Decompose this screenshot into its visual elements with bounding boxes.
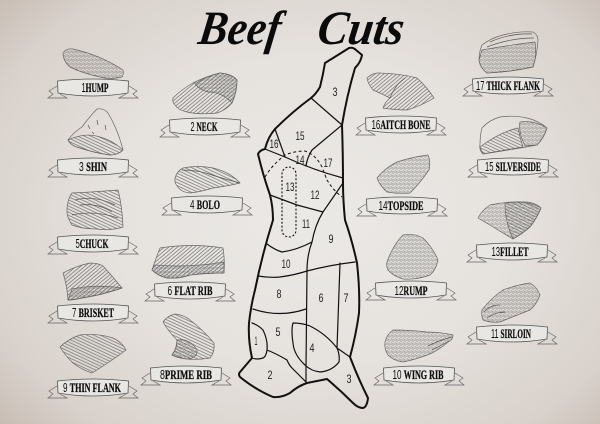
icon: wing rib cut bbox=[385, 330, 453, 362]
panel: 16 aitch bone bbox=[356, 73, 446, 135]
panel: 6 flat rib bbox=[145, 246, 235, 301]
icon: shin cut bbox=[68, 109, 123, 155]
icon: rump cut bbox=[387, 234, 438, 279]
ribbon: 8 prime rib: 8PRIME RIB bbox=[160, 367, 212, 382]
panel: 5 chuck bbox=[48, 190, 138, 254]
icon: fillet cut bbox=[478, 202, 541, 239]
diagram: beef carcass bbox=[239, 48, 368, 408]
ribbon: 10 wing rib: 10 WING RIB bbox=[392, 367, 444, 382]
panel: 12 rump bbox=[366, 234, 456, 300]
icon: thick flank cut bbox=[479, 32, 538, 73]
panel: 17 thick flank bbox=[463, 32, 553, 96]
cut boundary lines bbox=[252, 98, 355, 383]
panel: 2 neck bbox=[160, 73, 250, 137]
ribbon: 4 bolo: 4 BOLO bbox=[190, 197, 220, 212]
panel: 11 sirloin bbox=[467, 283, 557, 344]
icon: bolo cut bbox=[175, 166, 240, 193]
cut numbers: 3 bbox=[332, 87, 338, 99]
cut numbers: 17 bbox=[324, 158, 332, 170]
title: Beef bbox=[195, 2, 289, 55]
cut numbers: 14 bbox=[296, 155, 305, 167]
panel: 3 shin bbox=[48, 109, 138, 177]
cut numbers: 10 bbox=[282, 259, 290, 271]
ribbon: 13 fillet: 13FILLET bbox=[492, 244, 529, 259]
panel: 9 thin flank bbox=[48, 334, 138, 398]
icon: hump cut bbox=[63, 49, 123, 78]
title bbox=[195, 2, 408, 55]
ribbon: 3 shin: 3 SHIN bbox=[79, 159, 107, 174]
icon: thin flank cut bbox=[60, 334, 126, 373]
icon: chuck cut bbox=[67, 190, 123, 230]
panel: 7 brisket bbox=[48, 263, 138, 323]
cut numbers: 9 bbox=[328, 234, 334, 246]
ribbon: 12 rump: 12RUMP bbox=[394, 283, 428, 298]
carcass outline bbox=[239, 48, 368, 408]
cut numbers bbox=[254, 87, 352, 386]
cut numbers: 13 bbox=[286, 182, 294, 194]
cut numbers: 7 bbox=[344, 293, 348, 305]
dashed region boundary bbox=[265, 151, 342, 197]
dotted fillet capsule bbox=[282, 167, 296, 237]
panel: 15 silverside bbox=[468, 116, 558, 177]
ribbon: 2 neck: 2 NECK bbox=[190, 119, 218, 134]
ribbon: 7 brisket: 7 BRISKET bbox=[72, 305, 114, 320]
panel: 14 topside bbox=[357, 155, 447, 216]
panel: 8 prime rib bbox=[141, 314, 231, 385]
ribbon: 9 thin flank: 9 THIN FLANK bbox=[63, 380, 122, 395]
ribbon: 15 silverside: 15 SILVERSIDE bbox=[485, 159, 541, 174]
ribbon: 5 chuck: 5CHUCK bbox=[76, 236, 109, 251]
cut numbers: 5 bbox=[276, 327, 280, 339]
ribbon: 1 hump: 1HUMP bbox=[82, 80, 109, 95]
ribbon: 17 thick flank: 17 THICK FLANK bbox=[476, 78, 541, 93]
cut numbers: 12 bbox=[310, 190, 320, 202]
panel: 10 wing rib bbox=[374, 330, 464, 385]
ribbon: 14 topside: 14TOPSIDE bbox=[378, 198, 424, 213]
cut numbers: 15 bbox=[296, 131, 304, 143]
icon: neck cut bbox=[173, 73, 237, 114]
icon: topside cut bbox=[377, 155, 430, 193]
icon: sirloin cut bbox=[482, 283, 540, 322]
cut numbers: 2 bbox=[268, 370, 272, 382]
cut numbers: 3 bbox=[346, 374, 352, 386]
panel: 4 bolo bbox=[162, 166, 252, 215]
ribbon: 11 sirloin: 11 SIRLOIN bbox=[491, 326, 531, 341]
cut numbers: 1 bbox=[254, 336, 258, 348]
panel: 13 fillet bbox=[467, 202, 557, 262]
cut numbers: 6 bbox=[318, 293, 324, 305]
cut numbers: 4 bbox=[310, 343, 315, 355]
icon: prime rib cut bbox=[163, 314, 214, 359]
ribbon: 16 aitch bone: 16AITCH BONE bbox=[372, 117, 430, 132]
cut numbers: 8 bbox=[276, 289, 282, 301]
icon: brisket cut bbox=[63, 263, 122, 300]
icon: silverside cut bbox=[480, 116, 547, 154]
cut numbers: 11 bbox=[302, 219, 310, 231]
ribbon: 6 flat rib: 6 FLAT RIB bbox=[168, 283, 213, 298]
cut numbers: 16 bbox=[270, 139, 278, 151]
icon: flat rib cut bbox=[152, 246, 224, 278]
panel: 1 hump bbox=[48, 49, 138, 98]
icon: aitch bone cut bbox=[367, 73, 434, 110]
title: Cuts bbox=[314, 2, 408, 55]
